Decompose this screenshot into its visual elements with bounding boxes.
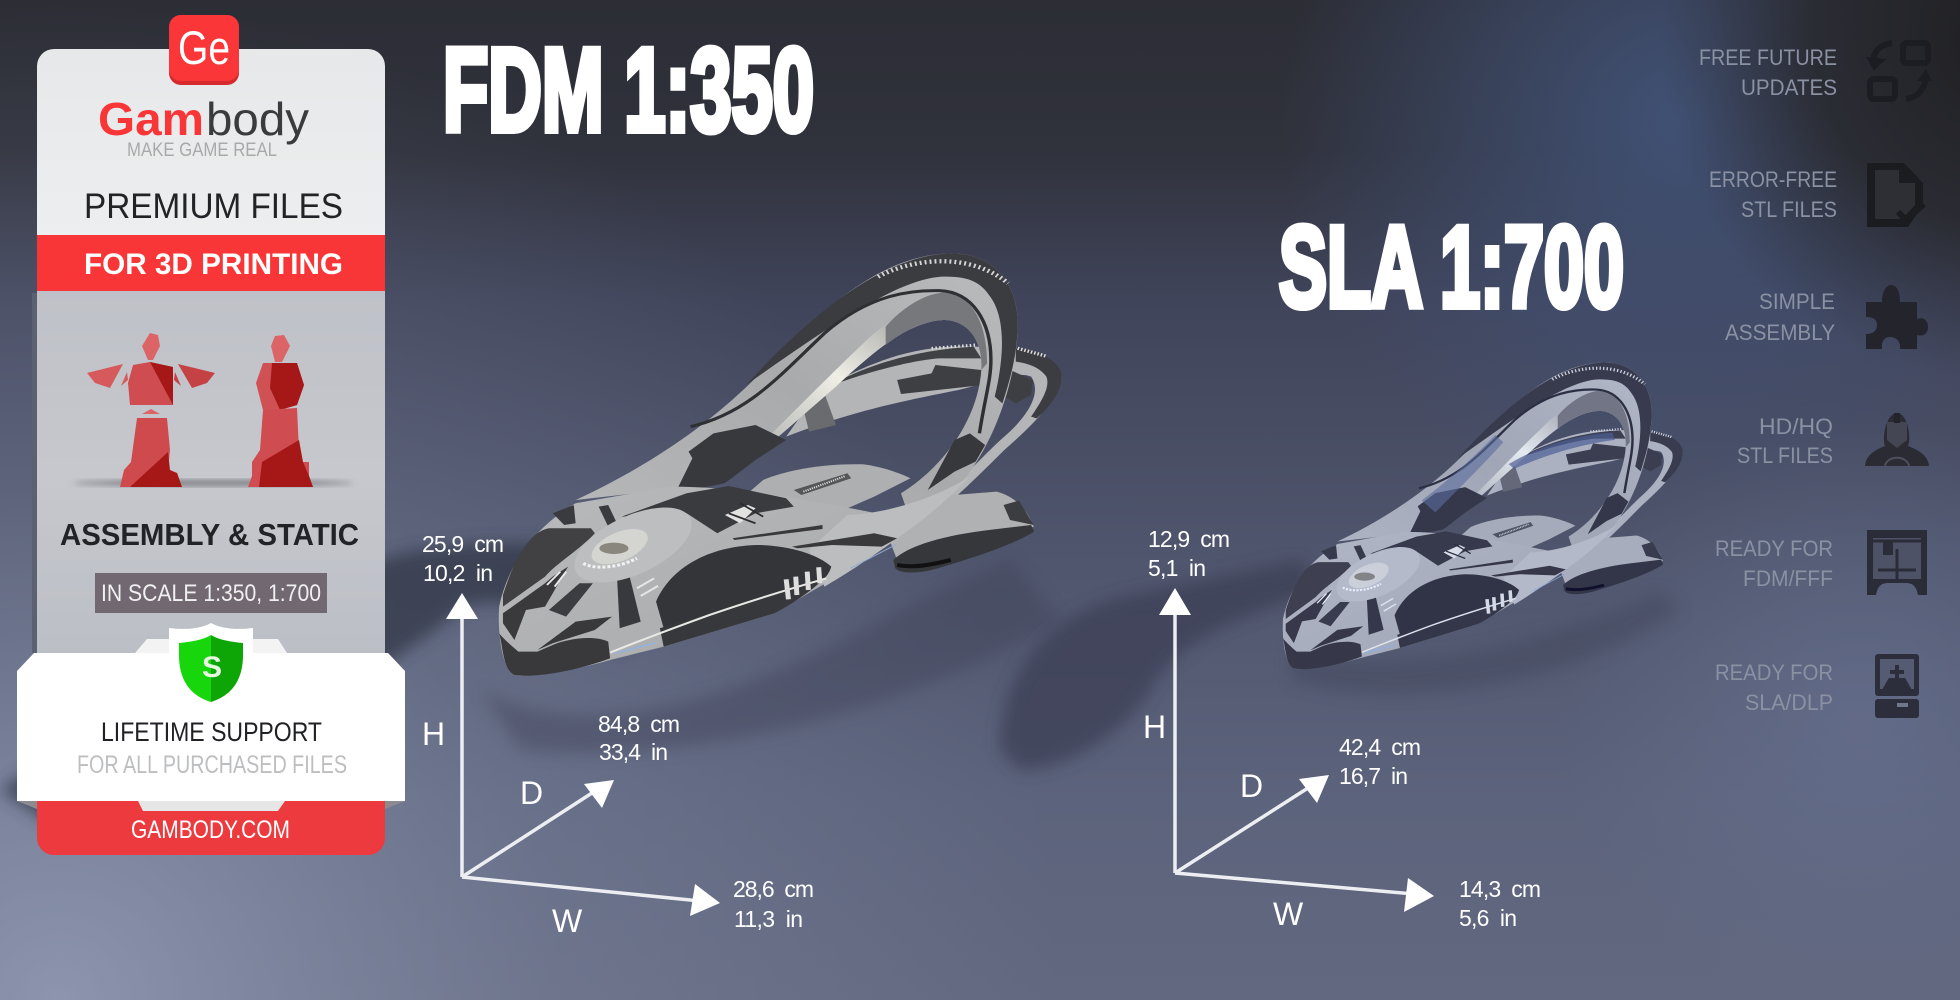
panel: red band xyxy=(37,235,385,291)
heading: premium files: PREMIUM FILES xyxy=(84,187,343,226)
dimensions: FDM model: H xyxy=(422,716,445,752)
dimensions: FDM model: 33,4 in xyxy=(599,739,668,765)
features list: UPDATES xyxy=(1741,75,1837,100)
dimensions: FDM model: 84,8 cm xyxy=(598,711,680,737)
big ship: FDM scale xyxy=(499,253,1062,676)
hull xyxy=(499,487,920,676)
features list: READY FOR xyxy=(1715,660,1833,685)
dimensions: FDM model: 10,2 in xyxy=(423,560,493,586)
icon: FDM printer xyxy=(1867,530,1927,595)
promo panel xyxy=(17,15,405,855)
icon: updates xyxy=(1868,43,1930,99)
front arc xyxy=(576,253,1018,527)
support ribbon: LIFETIME SUPPORT xyxy=(101,717,322,747)
dimensions: SLA model: W xyxy=(1273,896,1304,932)
panel: grey body xyxy=(37,291,385,660)
panel: red footer xyxy=(37,800,385,855)
dimensions: SLA model: 16,7 in xyxy=(1339,763,1408,789)
dimensions: SLA model: 12,9 cm xyxy=(1148,526,1230,552)
dimensions: SLA model: 5,1 in xyxy=(1148,555,1206,581)
icon: iron man bust xyxy=(1865,413,1929,466)
heading: for 3D printing: FOR 3D PRINTING xyxy=(84,248,343,281)
dimensions: SLA model: 14,3 cm xyxy=(1459,876,1541,902)
features list: SLA/DLP xyxy=(1745,690,1833,715)
icon: error-free file xyxy=(1867,163,1924,227)
bridge dome xyxy=(560,492,706,598)
heading: assembly and static: ASSEMBLY & STATIC xyxy=(60,517,359,552)
title: SLA 1:700: SLA 1:700 xyxy=(1279,204,1624,332)
icon: green shield: S xyxy=(202,651,222,684)
dimensions: FDM model xyxy=(422,531,814,939)
features list: FDM/FFF xyxy=(1743,566,1833,591)
features list: HD/HQ xyxy=(1759,414,1833,439)
features list: STL FILES xyxy=(1737,443,1833,468)
figure: arms open xyxy=(87,333,215,487)
icon: Ge logo: Ge xyxy=(178,21,230,74)
features list: ERROR-FREE xyxy=(1709,167,1837,192)
panel: light header xyxy=(37,49,385,235)
icon: puzzle piece xyxy=(1866,285,1928,349)
dimensions: SLA model: D xyxy=(1240,768,1263,804)
scale tag: IN SCALE 1:350, 1:700 xyxy=(101,580,321,607)
features list xyxy=(1699,45,1837,715)
panel: red footer: GAMBODY.COM xyxy=(131,816,290,844)
ship shadows on the floor xyxy=(0,543,1680,830)
dimensions: SLA model: 42,4 cm xyxy=(1339,734,1421,760)
icon: Ge logo xyxy=(169,15,239,85)
dimensions: SLA model: 5,6 in xyxy=(1459,905,1517,931)
logo wordmark xyxy=(98,93,309,145)
features list: SIMPLE xyxy=(1759,289,1835,314)
figure shadow xyxy=(73,480,353,486)
scale tag xyxy=(95,573,327,613)
panel: left edge xyxy=(32,293,37,653)
dimensions: FDM model: 11,3 in xyxy=(734,906,803,932)
features list: STL FILES xyxy=(1741,197,1837,222)
dimensions: SLA model: H xyxy=(1143,709,1166,745)
dimensions: FDM model: 28,6 cm xyxy=(733,876,814,902)
features list: FREE FUTURE xyxy=(1699,45,1837,70)
dark top panel xyxy=(622,486,794,533)
support ribbon xyxy=(17,639,405,811)
logo wordmark: body xyxy=(206,93,309,145)
icon: green shield xyxy=(169,623,253,702)
hull dark side panel xyxy=(656,545,831,628)
support ribbon: FOR ALL PURCHASED FILES xyxy=(77,751,347,779)
icon: SLA printer xyxy=(1875,654,1919,718)
dimensions: FDM model: D xyxy=(520,775,543,811)
dimensions: SLA model xyxy=(1143,526,1541,932)
tagline: MAKE GAME REAL xyxy=(127,139,277,161)
dimensions: FDM model: 25,9 cm xyxy=(422,531,504,557)
right pod xyxy=(886,492,1034,570)
features list: ASSEMBLY xyxy=(1725,320,1835,345)
rear wing xyxy=(748,464,911,510)
dimensions: FDM model: W xyxy=(552,903,583,939)
rear ring xyxy=(786,346,1062,523)
figure: arms crossed xyxy=(248,335,313,487)
title: FDM 1:350: FDM 1:350 xyxy=(443,24,814,156)
hull nose xyxy=(499,633,610,676)
logo wordmark: Gam xyxy=(98,93,204,145)
features list: READY FOR xyxy=(1715,536,1833,561)
small ship: SLA scale xyxy=(1283,362,1683,669)
